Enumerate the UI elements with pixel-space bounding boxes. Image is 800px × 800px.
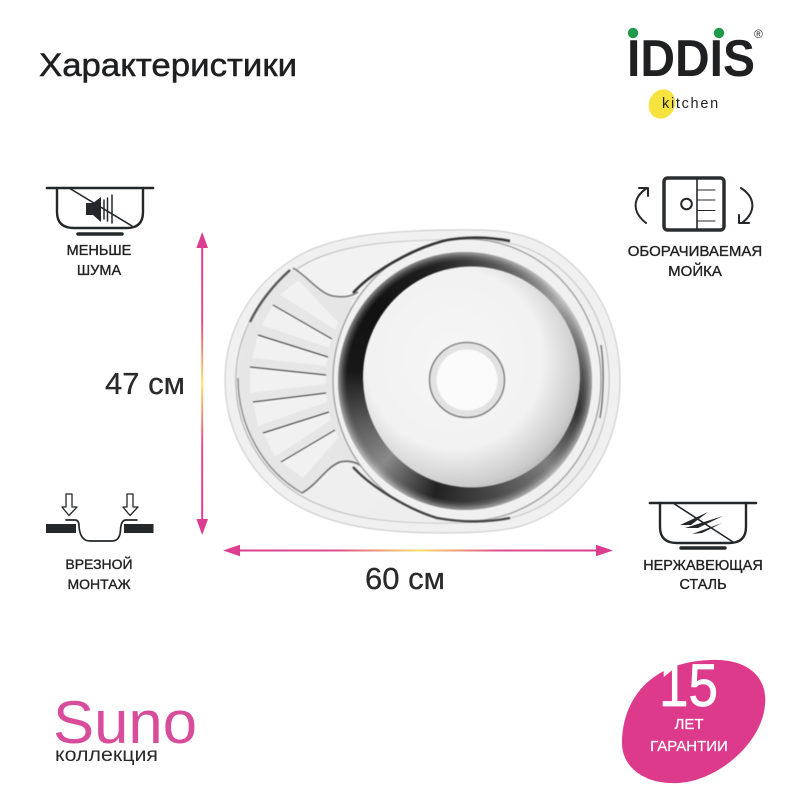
title: Характеристики: [39, 47, 297, 83]
label: stainless steel: СТАЛЬ: [679, 577, 727, 593]
logo green dot left: [628, 28, 638, 38]
bowl floor: [363, 266, 580, 488]
label: flush mount: ВРЕЗНОЙ: [65, 555, 133, 572]
collection caption: коллекция: [55, 745, 158, 766]
horizontal dimension arrow: [223, 545, 613, 556]
warranty badge: [622, 652, 765, 783]
vertical dimension arrow: [196, 232, 208, 535]
yellow spot: [644, 85, 680, 123]
logo: IDDIS kitchen: [627, 27, 763, 123]
label: less noise: ШУМА: [77, 263, 121, 279]
warranty caption: ЛЕТ: [674, 716, 704, 733]
label: stainless steel: НЕРЖАВЕЮЩАЯ: [643, 558, 763, 574]
collection name: [53, 689, 197, 766]
icon: flush mount: [46, 494, 154, 541]
icon: stainless steel: [650, 503, 756, 548]
icon: reversible sink: [636, 178, 752, 230]
pink blob: [622, 660, 765, 783]
sink deck: [236, 240, 609, 523]
warranty caption: ГАРАНТИИ: [650, 738, 728, 755]
width label: 60 см: [365, 561, 445, 596]
bowl wall: [338, 252, 592, 510]
warranty years: 15: [659, 652, 718, 719]
drain hole: [430, 342, 504, 418]
label: reversible sink: ОБОРАЧИВАЕМАЯ: [628, 243, 762, 260]
label: reversible sink: МОЙКА: [668, 262, 722, 280]
bowl outer ring: [333, 238, 603, 521]
sink photo: [225, 230, 620, 533]
logo wordmark: IDDIS: [627, 30, 755, 88]
registered mark: ®: [754, 27, 763, 41]
kitchen word: kitchen: [662, 96, 720, 112]
icon: less noise: [47, 188, 153, 234]
sink rim: [225, 230, 620, 533]
Suno heading: Suno: [53, 689, 197, 756]
logo green dot right: [714, 28, 724, 38]
drainboard: [238, 268, 366, 493]
label: less noise: МЕНЬШЕ: [67, 243, 132, 259]
height label: 47 см: [105, 366, 185, 401]
label: flush mount: МОНТАЖ: [67, 576, 131, 592]
